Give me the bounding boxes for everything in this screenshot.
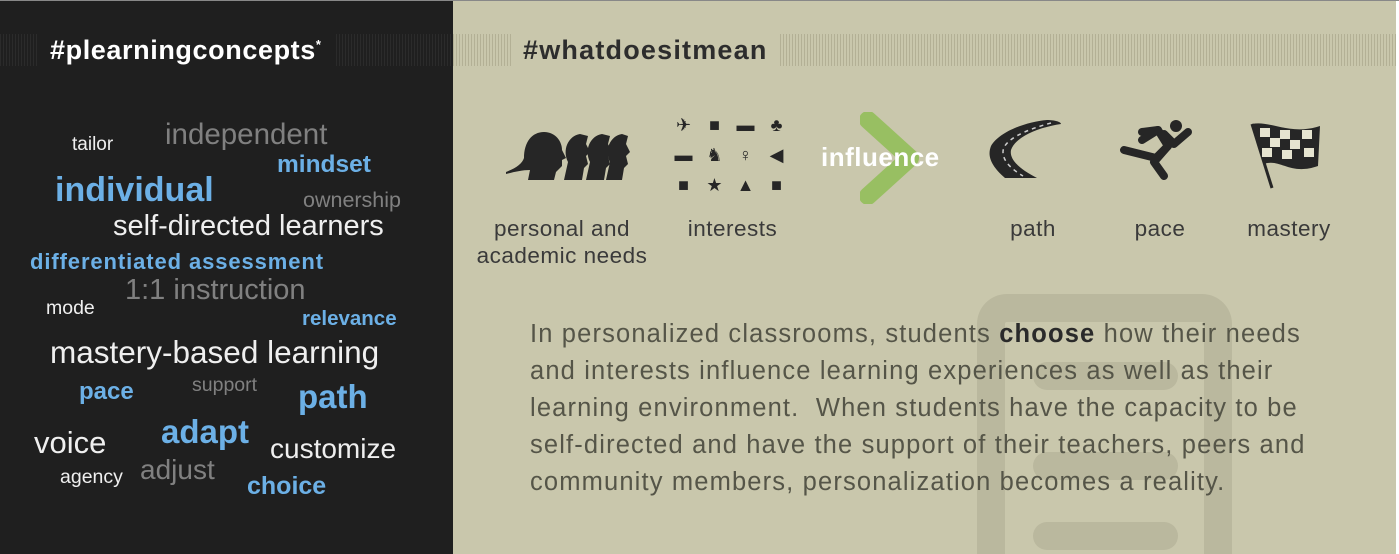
label: personal and academic needs: academic needs <box>477 243 647 268</box>
word cloud: support <box>192 374 257 396</box>
icon: heads <box>506 132 630 180</box>
word cloud: customize <box>270 433 396 464</box>
label: interests: interests <box>688 216 777 241</box>
word cloud: pace <box>79 378 134 405</box>
label: mastery: mastery <box>1247 216 1331 241</box>
background faded icon <box>977 294 1232 554</box>
word cloud: 1:1 instruction <box>125 274 306 306</box>
label: pace: pace <box>1135 216 1185 241</box>
icon: interests grid: ▲ <box>737 175 754 195</box>
text: influence: influence <box>821 142 940 172</box>
word cloud: self-directed learners <box>113 210 384 242</box>
icon: interests grid <box>674 115 784 195</box>
header stripes <box>0 34 453 66</box>
word cloud: differentiated assessment <box>30 249 324 274</box>
icon: road <box>990 120 1061 178</box>
text block: description: In personalized classrooms, students choose how their needs <box>530 320 1301 348</box>
icon: interests grid: ✈ <box>676 115 691 135</box>
panel: plearning concepts (dark) <box>0 1 453 554</box>
icon: runner <box>1120 120 1192 180</box>
icon: interests grid: ◀ <box>770 145 783 165</box>
label: path: path <box>1010 216 1056 241</box>
text block: description: self-directed and have the support of their teachers, peers and <box>530 431 1306 459</box>
label: personal and academic needs: personal and <box>494 216 630 241</box>
word cloud: tailor <box>72 134 113 155</box>
text block: description <box>530 320 1306 496</box>
word cloud: voice <box>34 425 106 460</box>
word cloud: ownership <box>303 188 401 212</box>
word cloud: mindset <box>277 151 371 178</box>
word cloud: adapt <box>161 413 249 450</box>
word cloud: choice <box>247 472 326 500</box>
icon: interests grid: ▬ <box>674 145 692 165</box>
icon: interests grid: ▬ <box>736 115 754 135</box>
text block: description: learning environment. When students have the capacity to be <box>530 394 1298 422</box>
icon: interests grid: ♣ <box>771 115 782 135</box>
word cloud: adjust <box>140 454 215 485</box>
word cloud <box>30 118 401 500</box>
panel: what does it mean (paper) <box>453 1 1396 554</box>
word cloud: mode <box>46 297 95 319</box>
heading: #plearningconcepts: #plearningconcepts* <box>50 35 322 65</box>
word cloud: individual <box>55 171 214 209</box>
header stripes <box>453 34 1396 66</box>
word cloud: relevance <box>302 307 397 330</box>
icon: interests grid: ■ <box>771 175 782 195</box>
word cloud: independent <box>165 118 327 151</box>
text block: description: community members, personalization becomes a reality. <box>530 468 1225 496</box>
word cloud: path <box>298 378 368 415</box>
icon: interests grid: ♀ <box>739 145 752 165</box>
icon: interests grid: ★ <box>706 175 723 195</box>
word cloud: mastery-based learning <box>50 334 379 370</box>
label: personal and academic needs <box>477 216 647 268</box>
icon: interests grid: ■ <box>709 115 720 135</box>
icon: checkered flag <box>1250 123 1320 188</box>
icon: interests grid: ♞ <box>706 145 723 165</box>
icon: interests grid: ■ <box>678 175 689 195</box>
heading: #whatdoesitmean: #whatdoesitmean <box>523 35 768 65</box>
text block: description: and interests influence learning experiences as well as their <box>530 357 1273 385</box>
word cloud: agency <box>60 466 123 488</box>
arrow: influence chevron <box>860 112 919 204</box>
